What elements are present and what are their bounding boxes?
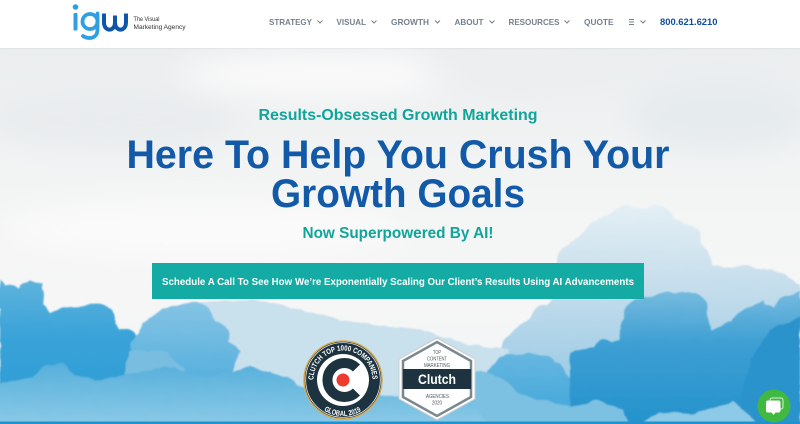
call to action button [152,263,644,299]
badge: Clutch top 1000 companies [303,340,383,420]
navigation menu: VISUAL [336,17,366,27]
badge: Clutch top 1000 companies: CLUTCH TOP 1000 COMPANIES [308,345,378,380]
badge: Clutch top content marketing agencies 2020: Clutch [418,371,456,387]
hero text [126,107,670,242]
badge: Clutch top content marketing agencies 2020: CONTENT [427,356,447,362]
main headline [126,133,670,216]
navigation menu: 800.621.6210 [660,17,718,28]
navigation menu: GROWTH [391,17,429,27]
navigation menu: QUOTE [584,17,614,27]
chat widget button [758,390,790,422]
logo: igw: Marketing Agency [134,24,186,31]
navigation menu: RESOURCES [508,17,560,27]
badge: Clutch top content marketing agencies 2020: 2020 [432,400,442,406]
main headline: Growth Goals [271,172,525,216]
badge: Clutch top content marketing agencies 2020: MARKETING [424,363,450,369]
blue cloud masses [0,279,800,424]
header bar [0,0,800,48]
badge: Clutch top content marketing agencies 2020: AGENCIES [426,394,450,400]
badge: Clutch top content marketing agencies 2020 [398,338,476,420]
logo: igw [72,4,186,40]
navigation menu: STRATEGY [269,17,312,27]
pale back clouds [190,206,800,424]
main headline: Here To Help You Crush Your [126,133,670,177]
navigation menu [269,17,718,28]
subheading: Now Superpowered By AI! [302,225,494,242]
badge: Clutch top 1000 companies: GLOBAL 2019 [324,406,360,416]
navigation menu: ABOUT [454,17,484,27]
logo: igw: The Visual [134,16,160,23]
badge: Clutch top content marketing agencies 2020: TOP [433,350,442,356]
eyebrow heading: Results-Obsessed Growth Marketing [258,107,538,124]
